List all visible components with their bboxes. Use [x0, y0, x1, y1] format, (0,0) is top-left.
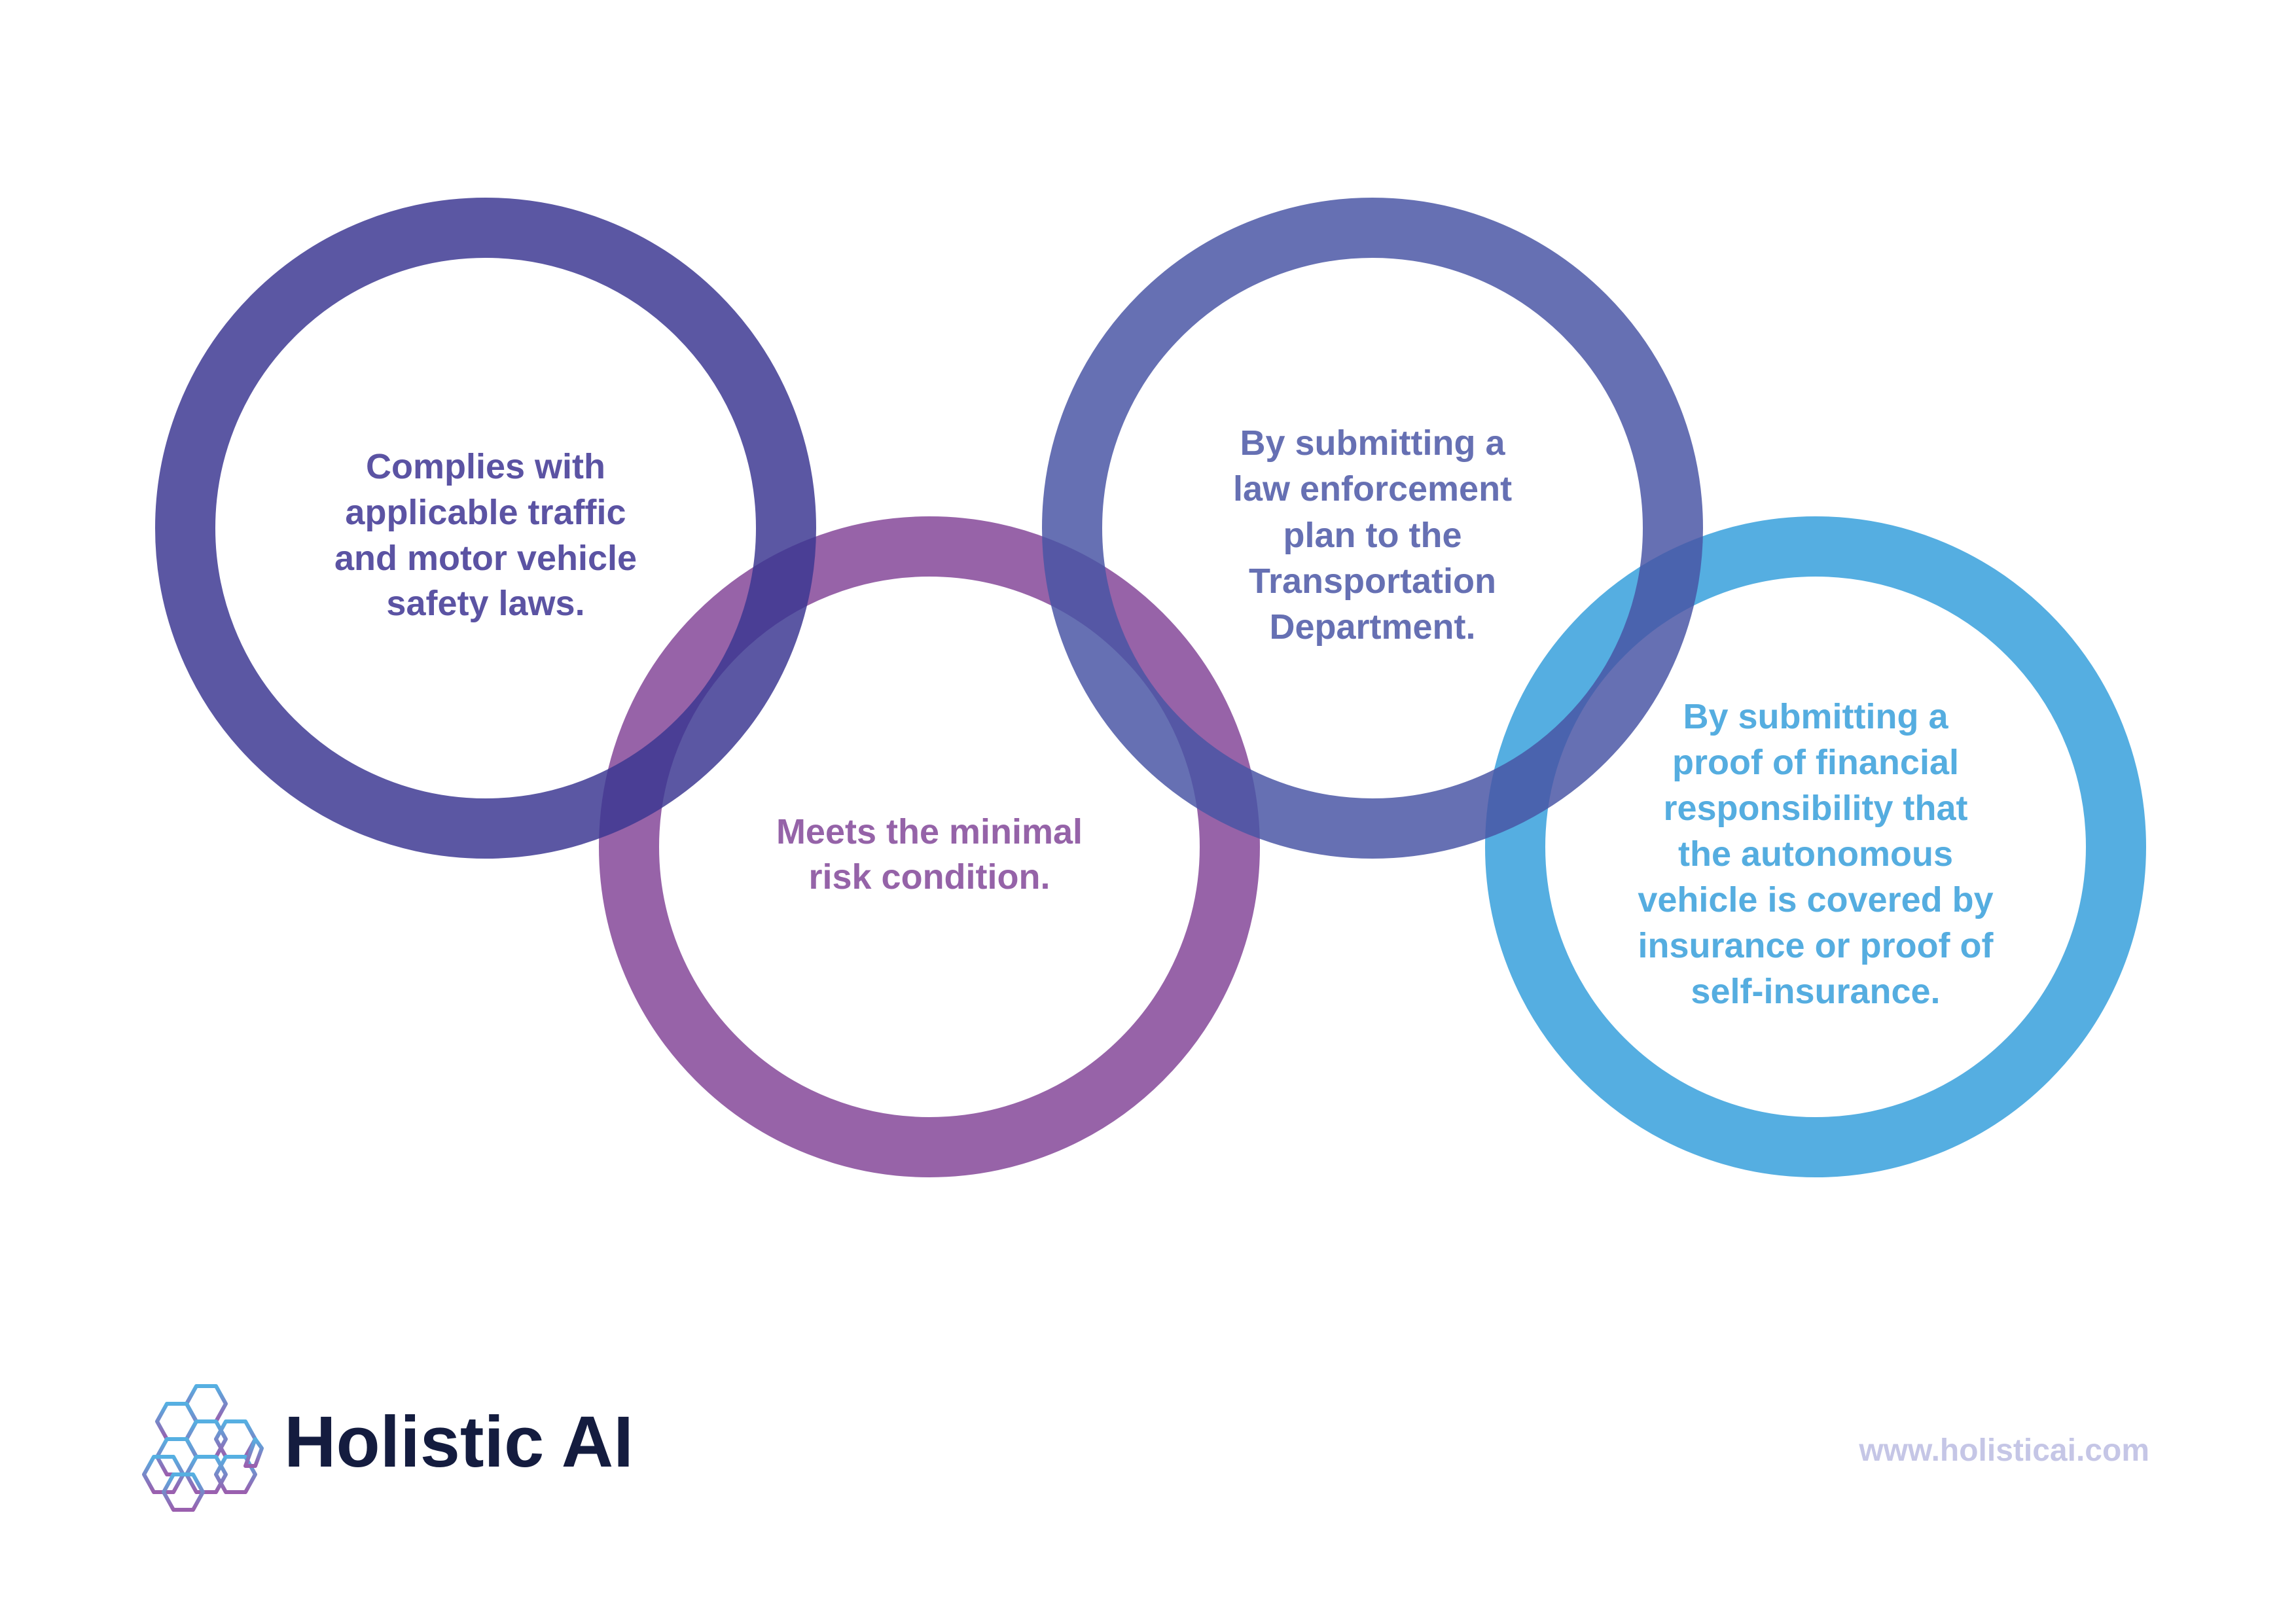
text: circle 2 — [776, 812, 1083, 897]
text: circle 1: Complies with — [366, 447, 605, 486]
text: circle 1: and motor vehicle — [334, 539, 637, 578]
website url: www.holisticai.com — [1858, 1433, 2149, 1468]
text: circle 3: By submitting a — [1240, 423, 1505, 463]
text: circle 4: vehicle is covered by — [1638, 880, 1994, 919]
text: circle 4: self-insurance. — [1691, 972, 1941, 1011]
text: circle 4: proof of financial — [1672, 743, 1959, 782]
text: circle 4: By submitting a — [1683, 697, 1948, 736]
text: circle 2: Meets the minimal — [776, 812, 1083, 851]
text: circle 2: risk condition. — [808, 857, 1050, 897]
ring 3: law enforcement plan — [1072, 228, 1673, 829]
text: circle 1: safety laws. — [386, 584, 585, 623]
text: circle 4: the autonomous — [1678, 834, 1953, 874]
ring 1: traffic laws — [185, 228, 786, 829]
text: circle 4 — [1638, 697, 1994, 1011]
text: circle 3 — [1233, 423, 1512, 647]
text: circle 4: insurance or proof of — [1638, 926, 1994, 965]
text: circle 3: Department. — [1269, 607, 1476, 647]
logo text: Holistic AI — [284, 1402, 634, 1482]
ring 4: financial responsibility — [1515, 546, 2116, 1147]
text: circle 3: law enforcement — [1233, 469, 1512, 508]
icon: logo hexagons — [144, 1386, 262, 1510]
text: circle 3: Transportation — [1249, 562, 1496, 601]
text: circle 3: plan to the — [1283, 516, 1462, 555]
text: circle 1: applicable traffic — [345, 493, 626, 532]
ring 2: minimal risk — [629, 546, 1230, 1147]
text: circle 4: responsibility that — [1663, 789, 1968, 828]
text: circle 1 — [334, 447, 637, 623]
